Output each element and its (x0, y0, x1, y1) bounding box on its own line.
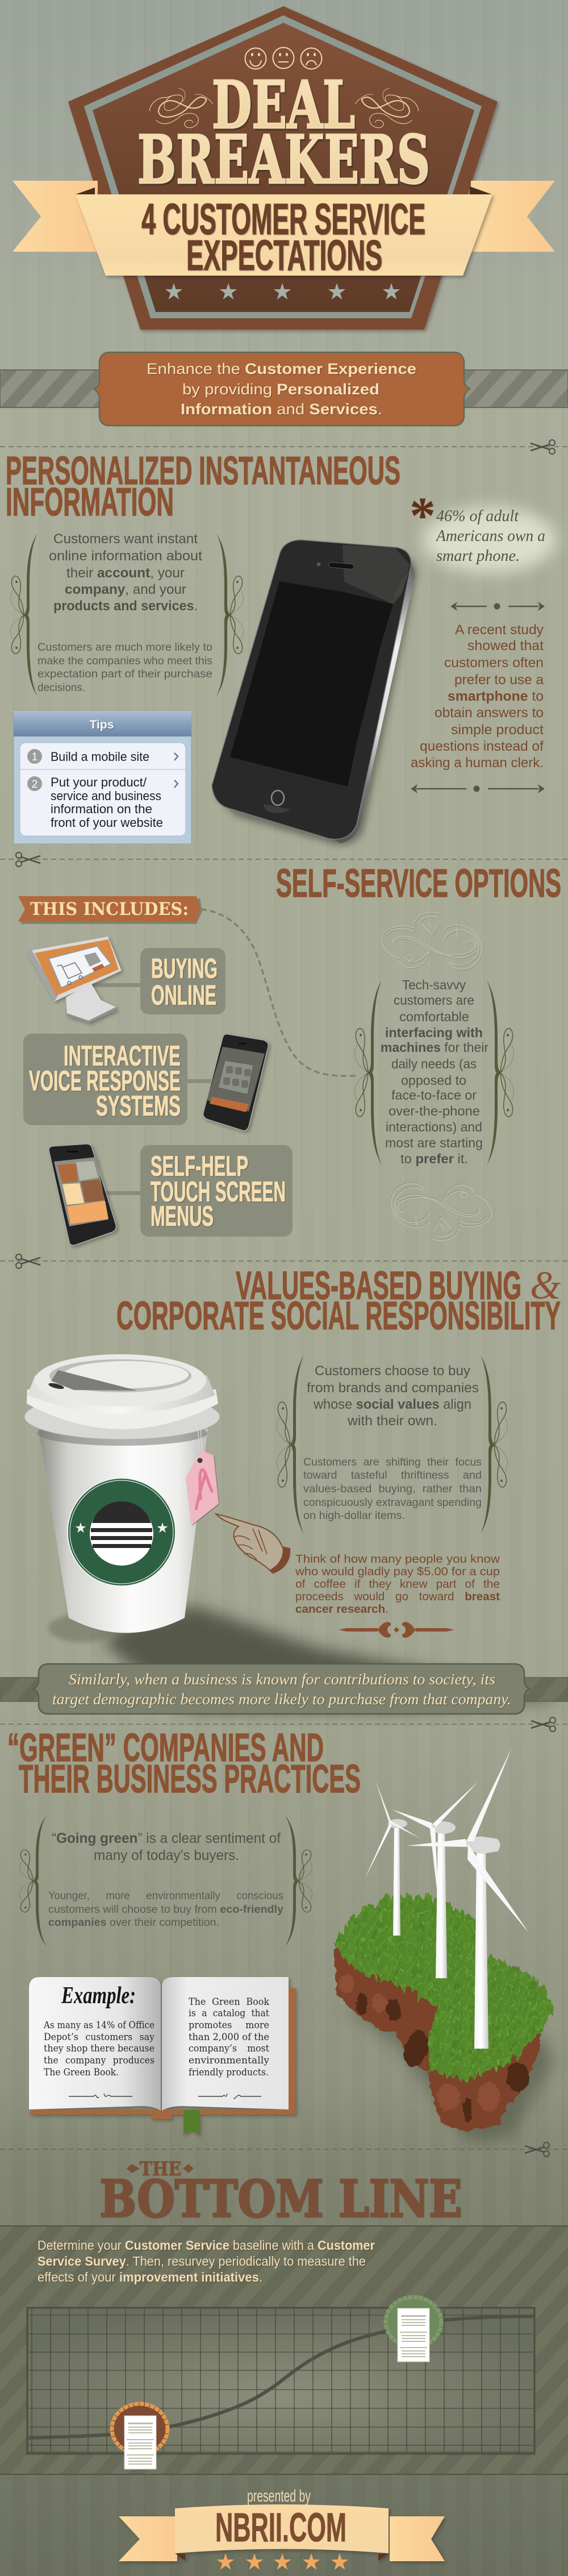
illustration: grass island with wind turbines (333, 1748, 555, 2142)
striped panel (0, 2226, 568, 2474)
secondary text: toward tasteful thriftiness and (303, 1470, 482, 1481)
lead text (49, 531, 202, 614)
right page (162, 1977, 289, 2111)
page ornaments (69, 2094, 261, 2099)
survey advice text: effects of your improvement initiatives. (37, 2270, 262, 2284)
lead text: products and services. (53, 598, 198, 614)
label: INTERACTIVE (64, 1040, 181, 1072)
label: BUYING (151, 954, 218, 984)
left column: they shop there because (44, 2043, 154, 2054)
icon: coffee cup (24, 1354, 220, 1633)
icon: phone with keypad (203, 1034, 268, 1131)
bookmark (183, 2110, 199, 2135)
cup body (38, 1425, 208, 1633)
left bracket (20, 1816, 47, 1946)
survey advice text (37, 2238, 375, 2284)
right bracket (216, 534, 243, 696)
text: breast cancer example: Think of how many people you know (295, 1553, 500, 1566)
ribbon: this includes: THIS INCLUDES: (30, 899, 189, 919)
lead text: Customers want instant (53, 531, 198, 547)
panel: tech-savvy text (355, 977, 513, 1166)
callout: smartphone ownership: smart phone. (436, 547, 520, 565)
label: SELF-HELP (151, 1150, 248, 1182)
label (140, 1145, 293, 1237)
follow-up survey badge (386, 2297, 441, 2362)
right column (189, 1996, 270, 2078)
text: interactions) and (386, 1120, 482, 1134)
secondary text (37, 642, 212, 694)
right column: company’s most (189, 2043, 269, 2054)
text: most are starting (385, 1135, 483, 1150)
book cover (28, 1988, 295, 2119)
text: daily needs (as (391, 1056, 477, 1071)
tips list: 1 (32, 751, 37, 763)
panel: instant info text (11, 531, 243, 696)
text: to prefer it. (400, 1151, 468, 1166)
icon: large smartphone (212, 540, 416, 845)
lead text (52, 1830, 281, 1863)
cut line 3 (0, 1254, 568, 1268)
survey advice text: Service Survey. Then, resurvey periodically to measure the (37, 2254, 366, 2269)
phone home button (264, 790, 290, 813)
phone metal edge (332, 560, 415, 843)
phone screen (230, 581, 393, 786)
left column: The Green Book. (44, 2067, 119, 2078)
trend line (27, 2316, 534, 2438)
panel: going green text (20, 1816, 312, 1946)
right column: is a catalog that (189, 2008, 269, 2019)
orange plate (94, 352, 470, 426)
secondary text: conspicuously extravagant spending (303, 1497, 482, 1509)
turbine middle (392, 1782, 478, 1978)
ribbon tails (12, 181, 555, 252)
quote text: Similarly, when a business is known for contributions to society, its (69, 1671, 495, 1688)
secondary text: values-based buying, rather than (303, 1483, 482, 1495)
secondary text: make the companies who meet this (37, 655, 212, 667)
divider (450, 602, 545, 611)
striped band (0, 1678, 568, 1701)
heading: values-based buying: & (530, 1264, 561, 1308)
text: breast cancer example: cancer research. (295, 1603, 389, 1616)
grass (334, 1896, 555, 2081)
text: comfortable (399, 1009, 469, 1024)
secondary text: companies over their competition. (48, 1917, 219, 1929)
left column: Depot’s customers say (44, 2032, 154, 2043)
text: recent study: asking a human clerk. (411, 755, 544, 771)
title badge (12, 6, 555, 330)
pentagon badge (68, 6, 498, 330)
turbine right (407, 1748, 529, 2049)
tips list: information on the (51, 802, 152, 816)
text: interfacing with (385, 1025, 483, 1040)
text: recent study: customers often (444, 655, 544, 671)
lead text: whose social values align (313, 1397, 471, 1412)
secondary text: Customers are much more likely to (37, 642, 212, 654)
label: VOICE RESPONSE (29, 1065, 181, 1097)
heading: green companies: “GREEN” COMPANIES AND (7, 1725, 324, 1770)
secondary text (48, 1890, 283, 1929)
cut line 5 (0, 2142, 568, 2157)
lead text (307, 1363, 479, 1429)
lead text: with their own. (347, 1413, 437, 1429)
rating stars (165, 283, 400, 299)
flourish left (149, 88, 213, 128)
text: recent study: showed that (467, 638, 544, 654)
text: face-to-face or (391, 1088, 477, 1102)
text: breast cancer example (295, 1553, 500, 1616)
title: deal breakers: DEAL (212, 67, 355, 144)
lead text: company, and your (65, 582, 186, 597)
left bracket (11, 534, 37, 696)
label: TOUCH SCREEN (151, 1176, 286, 1208)
intro text: Information and Services . (181, 401, 382, 418)
logo ribbon: nbrii (119, 2504, 445, 2561)
phone reflection (343, 545, 410, 604)
survey advice text: Determine your Customer Service baseline with a Customer (37, 2238, 375, 2253)
presented by: presented by (247, 2487, 311, 2506)
text: breast cancer example: who would gladly pay $5.00 for a cup (295, 1565, 500, 1578)
option: self-help touch screens (49, 1144, 293, 1245)
lead text: many of today’s buyers. (94, 1847, 239, 1863)
lead text: from brands and companies (307, 1380, 479, 1396)
text: opposed to (401, 1073, 466, 1088)
dashed connector arrow (201, 909, 357, 1076)
callout: smartphone ownership (410, 486, 557, 573)
secondary text: expectation part of their purchase (37, 668, 212, 680)
phone body (212, 540, 411, 839)
label: ONLINE (151, 980, 216, 1011)
right column: friendly products. (189, 2067, 269, 2078)
text (381, 977, 488, 1166)
panel: tips (14, 711, 191, 844)
right column: promotes more (189, 2020, 269, 2031)
subtitle: EXPECTATIONS (186, 231, 382, 279)
heading: personalized instantaneous information: INFORMATION (6, 480, 174, 524)
tips list (20, 743, 186, 836)
lead text: Customers choose to buy (315, 1363, 470, 1379)
label (23, 1034, 187, 1125)
secondary text: on high-dollar items. (303, 1510, 405, 1522)
heading: the bottom line: THE (140, 2158, 181, 2180)
text: customers are (394, 993, 474, 1008)
ribbon: this includes (18, 896, 202, 924)
text: recent study: A recent study (455, 622, 544, 638)
intro banner (0, 352, 568, 426)
lead text: their account, your (66, 565, 185, 581)
title: deal breakers: BREAKERS (137, 120, 430, 199)
tips list: Put your product/ (51, 775, 147, 789)
cut line 2 (0, 852, 568, 867)
heading: green companies (7, 1725, 361, 1801)
callout: smartphone ownership: Americans own a (435, 527, 545, 545)
text: Tech-savvy (402, 977, 466, 992)
left bracket (355, 980, 382, 1165)
turbine left (365, 1780, 420, 1936)
left column: the company produces (44, 2055, 154, 2066)
secondary text: customers will choose to buy from eco-friendly (48, 1904, 283, 1916)
ornament: embossed flourish bottom (391, 1183, 491, 1241)
heading: the bottom line: BOTTOM LINE (99, 2169, 462, 2228)
island shadow (341, 2006, 554, 2142)
tips list: front of your website (51, 815, 163, 830)
secondary text (303, 1456, 482, 1522)
right column: environmentally (189, 2055, 269, 2066)
intro text: Enhance the Customer Experience (147, 360, 416, 377)
option: buying online (26, 937, 225, 1023)
text: breast cancer example: of coffee if they knew part of the (295, 1578, 500, 1591)
cut line 4 (0, 1717, 568, 1732)
right column: The Green Book (189, 1996, 270, 2008)
intro text (147, 360, 416, 418)
cup shadow (102, 1605, 568, 1711)
connector (187, 1079, 216, 1083)
heading: values-based buying (116, 1263, 561, 1338)
callout: smartphone ownership: 46% of adult (436, 507, 519, 525)
secondary text: decisions. (37, 682, 85, 694)
logo text: NBRII.COM (215, 2506, 346, 2550)
panel: social values text (277, 1355, 507, 1534)
baseline survey badge (112, 2404, 168, 2469)
right bracket (285, 1816, 312, 1946)
flourish right (355, 88, 419, 128)
smiley faces (245, 48, 321, 69)
option: interactive voice response (23, 1034, 268, 1131)
ribbon tag (186, 1428, 219, 1525)
line chart (27, 2308, 534, 2454)
quote text (52, 1671, 511, 1708)
panel: bottom line (0, 2226, 568, 2474)
text: recent study: simple product (451, 722, 544, 738)
text: recent study (411, 622, 544, 771)
subtitle (141, 195, 425, 279)
text: recent study: smartphone to (448, 689, 544, 704)
lid (24, 1354, 220, 1439)
intro text: by providing Personalized (182, 381, 379, 398)
ribbon banner (76, 194, 492, 276)
label (140, 948, 225, 1014)
ornament: embossed flourish top (382, 912, 482, 969)
left column (43, 2020, 154, 2078)
right column: than 2,000 of the (189, 2032, 269, 2043)
connector (105, 1191, 141, 1195)
icon: pointing hand (216, 1514, 290, 1573)
icon: open book (28, 1977, 295, 2135)
title: deal breakers (137, 67, 430, 199)
quote text: target demographic becomes more likely to purchase from that company. (52, 1691, 511, 1708)
secondary text: Younger, more environmentally conscious (48, 1890, 283, 1902)
right bracket (487, 980, 513, 1165)
left page (29, 1977, 161, 2111)
text: over-the-phone (389, 1104, 480, 1118)
label: MENUS (151, 1200, 214, 1232)
divider (411, 784, 545, 793)
tips header (14, 711, 191, 736)
tips list: Build a mobile site (51, 750, 149, 764)
plate (34, 1664, 529, 1714)
left bracket (277, 1355, 304, 1534)
callout band: contributions to society (0, 1664, 568, 1714)
text: recent study: questions instead of (420, 739, 544, 754)
secondary text: Customers are shifting their focus (303, 1456, 482, 1468)
text: recent study: obtain answers to (435, 705, 544, 721)
icon: phone with tiles (49, 1144, 116, 1245)
lead text: “Going green” is a clear sentiment of (52, 1830, 281, 1846)
heading: personalized instantaneous information (6, 448, 400, 524)
tips list: service and business (51, 789, 161, 803)
text: recent study: prefer to use a (454, 672, 544, 688)
phone speaker and camera (317, 562, 354, 569)
example heading: Example: (61, 1983, 136, 2009)
tips list: 2 (32, 779, 37, 790)
lead text: online information about (49, 548, 202, 564)
soil (333, 1944, 541, 2131)
cut line 1 (0, 440, 568, 454)
connector (91, 983, 142, 987)
text: machines for their (381, 1040, 488, 1055)
ground ring (48, 1614, 116, 1642)
icon: kiosk monitor (26, 937, 122, 1023)
text: breast cancer example: proceeds would go toward breast (295, 1590, 500, 1603)
logo (68, 1478, 176, 1586)
right bracket (481, 1355, 507, 1534)
footer stars (217, 2553, 348, 2570)
striped band (0, 370, 568, 407)
brown divider (339, 1622, 454, 1638)
left column: As many as 14% of Office (43, 2020, 154, 2031)
label: SYSTEMS (96, 1090, 181, 1122)
tips header: Tips (90, 718, 114, 731)
callout: smartphone ownership: * (410, 486, 436, 544)
